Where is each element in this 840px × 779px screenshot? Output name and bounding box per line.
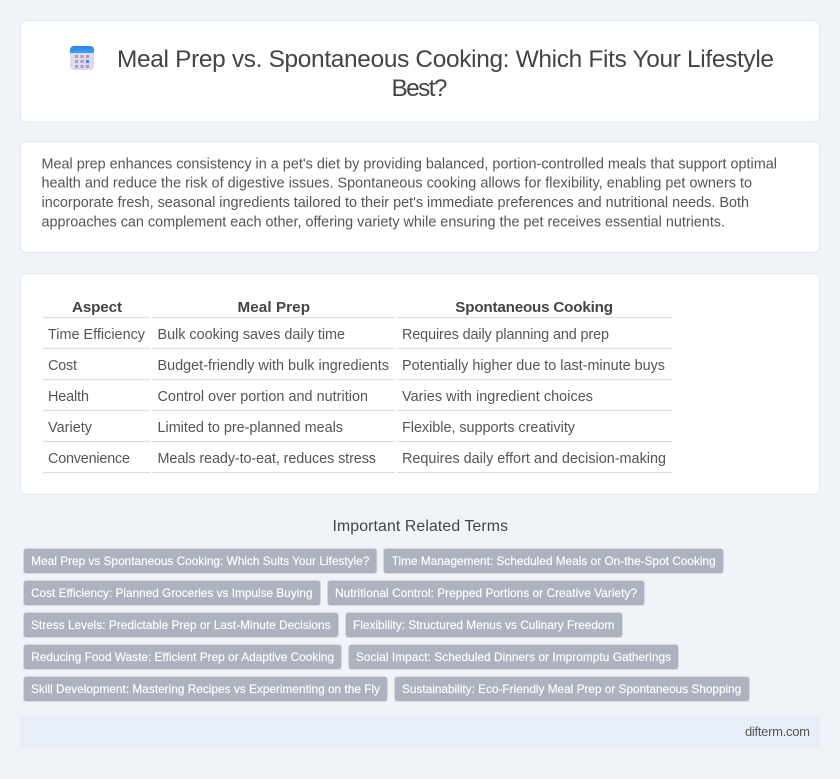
table row: health: Health xyxy=(48,389,89,405)
table row: time efficiency xyxy=(43,327,672,348)
title: Meal Prep vs. Spontaneous Cooking: Which Fits Your Lifestyle xyxy=(117,46,774,73)
footer bar xyxy=(20,715,820,749)
table row: convenience: Requires daily effort and decision-making xyxy=(402,451,666,467)
tag group: related terms: Nutritional Control: Prepped Portions or Creative Variety? xyxy=(335,586,637,600)
table header row xyxy=(43,299,672,318)
table header row: Meal Prep xyxy=(238,299,310,316)
table row: variety: Variety xyxy=(48,420,93,436)
tag group: related terms: Reducing Food Waste: Efficient Prep or Adaptive Cooking xyxy=(31,650,334,664)
table row: convenience: Convenience xyxy=(48,451,130,467)
panel: header xyxy=(20,20,820,122)
heading: important related terms: Important Related Terms xyxy=(332,518,508,535)
tag group: related terms: Sustainability: Eco-Friendly Meal Prep or Spontaneous Shopping xyxy=(402,682,741,696)
tag group: related terms: Skill Development: Mastering Recipes vs Experimenting on the Fly xyxy=(31,682,380,696)
tag group: related terms: Cost Efficiency: Planned Groceries vs Impulse Buying xyxy=(31,586,312,600)
tag group: related terms: Time Management: Scheduled Meals or On-the-Spot Cooking xyxy=(392,554,716,568)
summary paragraph: Meal prep enhances consistency in a pet's diet by providing balanced, portion-controlled meals that support optimal xyxy=(42,156,777,172)
icon: calendar xyxy=(70,46,94,70)
table row: health: Varies with ingredient choices xyxy=(402,389,593,405)
table row: convenience: Meals ready-to-eat, reduces stress xyxy=(158,451,376,467)
table header row: Aspect xyxy=(72,299,122,316)
tag group: related terms xyxy=(24,548,750,702)
summary paragraph: health and reduce the risk of digestive issues. Spontaneous cooking allows for flexibility, enabling pet owners to xyxy=(42,176,752,192)
tag group: related terms: Social Impact: Scheduled Dinners or Impromptu Gatherings xyxy=(356,650,671,664)
footer site name: difterm.com xyxy=(745,724,810,739)
summary paragraph: approaches can complement each other, offering variety while ensuring the pet receives essential nutrients. xyxy=(42,214,725,230)
table row: cost: Potentially higher due to last-minute buys xyxy=(402,358,665,374)
table row: cost: Budget-friendly with bulk ingredients xyxy=(158,358,389,374)
tag group: related terms: Meal Prep vs Spontaneous Cooking: Which Suits Your Lifestyle? xyxy=(31,554,370,568)
table row: cost xyxy=(43,358,672,380)
tag group: related terms: Stress Levels: Predictable Prep or Last-Minute Decisions xyxy=(31,618,331,632)
summary paragraph: incorporate fresh, seasonal ingredients tailored to their pet's immediate preferences and nutritional needs. Both xyxy=(42,195,749,211)
table row: convenience xyxy=(43,451,672,472)
table row: variety xyxy=(43,420,672,442)
tag group: related terms: Flexibility: Structured Menus vs Culinary Freedom xyxy=(353,618,614,632)
table row: health xyxy=(43,389,672,410)
table row: variety: Flexible, supports creativity xyxy=(402,420,576,436)
table row: time efficiency: Bulk cooking saves daily time xyxy=(158,327,345,343)
table row: time efficiency: Time Efficiency xyxy=(48,327,146,343)
table row: health: Control over portion and nutrition xyxy=(158,389,368,405)
table row: time efficiency: Requires daily planning and prep xyxy=(402,327,609,343)
table header row: Spontaneous Cooking xyxy=(455,299,613,316)
panel: comparison table xyxy=(20,274,820,494)
table row: cost: Cost xyxy=(48,358,77,374)
table row: variety: Limited to pre-planned meals xyxy=(158,420,343,436)
title: Best? xyxy=(392,75,448,102)
panel: summary text xyxy=(20,142,820,252)
